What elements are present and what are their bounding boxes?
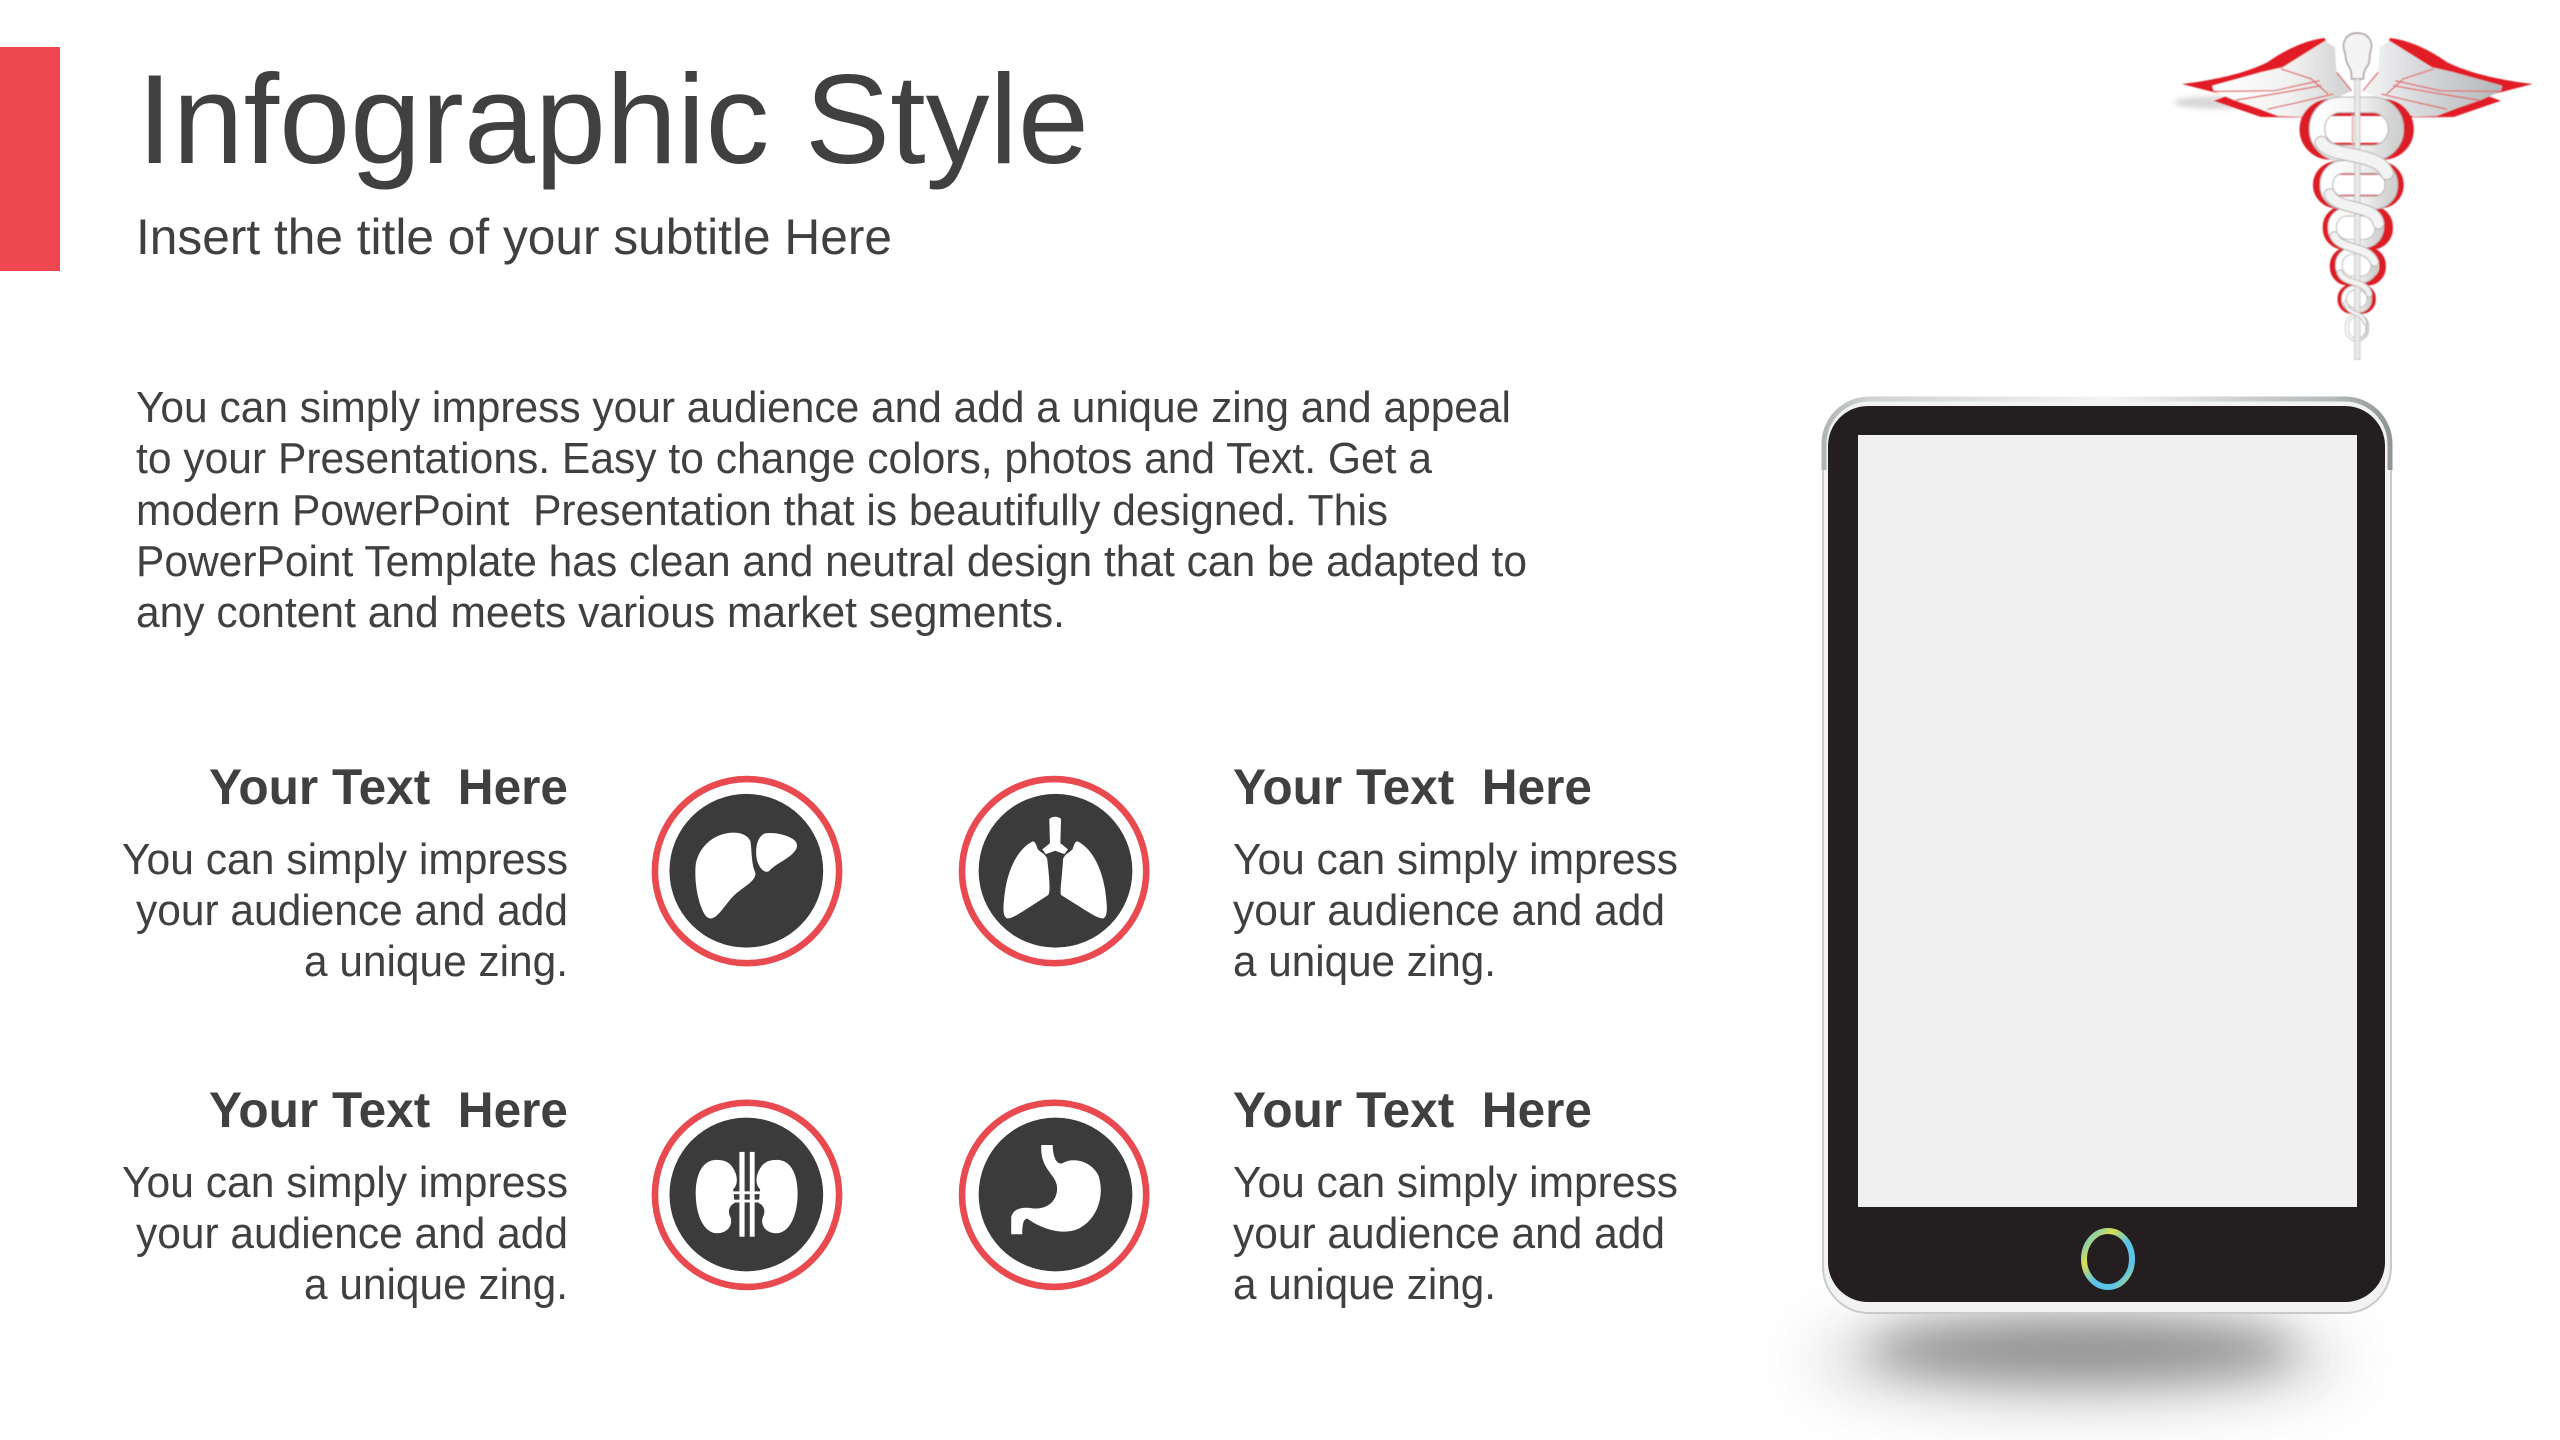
staff head: [2343, 33, 2371, 79]
text block: bottom right: Your Text Here: [1233, 1082, 1592, 1138]
text block: top right: You can simply impress: [1233, 835, 1678, 884]
text block: top left: Your Text Here: [209, 759, 568, 815]
text block: bottom right: a unique zing.: [1233, 1260, 1496, 1309]
text block: top right: a unique zing.: [1233, 937, 1496, 986]
left wing: [2182, 38, 2352, 118]
icon: kidneys: [655, 1103, 839, 1287]
text block: top left: a unique zing.: [304, 937, 568, 986]
text block: bottom left: your audience and add: [136, 1209, 568, 1258]
title: Infographic Style: [137, 48, 1089, 190]
icon: liver: [655, 779, 839, 963]
snake crossings: [2321, 143, 2387, 323]
icon: stomach: [962, 1103, 1146, 1287]
text block: top right: [1233, 759, 1678, 986]
text block: bottom left: a unique zing.: [304, 1260, 568, 1309]
text block: top left: [122, 759, 568, 986]
text block: bottom left: You can simply impress: [122, 1158, 568, 1207]
text block: top right: your audience and add: [1233, 886, 1665, 935]
staff rod: [2352, 79, 2360, 360]
tablet device: [1823, 398, 2391, 1313]
text block: bottom left: Your Text Here: [209, 1082, 568, 1138]
intro paragraph: [136, 383, 1527, 637]
icon: caduceus: [2174, 33, 2533, 360]
red accent bar: [0, 47, 60, 271]
intro paragraph: modern PowerPoint Presentation that is beautifully designed. This: [136, 486, 1388, 535]
text block: top left: your audience and add: [136, 886, 568, 935]
text block: bottom right: [1233, 1082, 1678, 1309]
snake coils: [2308, 105, 2405, 339]
tablet body: [1828, 406, 2385, 1302]
tablet bezel: [1823, 398, 2391, 1313]
right wing: [2363, 38, 2533, 118]
icon: lungs: [962, 779, 1146, 963]
text block: bottom right: your audience and add: [1233, 1209, 1665, 1258]
text block: top right: Your Text Here: [1233, 759, 1592, 815]
intro paragraph: You can simply impress your audience and add a unique zing and appeal: [136, 383, 1511, 432]
tablet home button: [2084, 1231, 2132, 1287]
text block: bottom right: You can simply impress: [1233, 1158, 1678, 1207]
text block: top left: You can simply impress: [122, 835, 568, 884]
intro paragraph: any content and meets various market segments.: [136, 588, 1065, 637]
subtitle: Insert the title of your subtitle Here: [136, 209, 892, 265]
text block: bottom left: [122, 1082, 568, 1309]
tablet shadow: [1808, 1310, 2348, 1410]
intro paragraph: PowerPoint Template has clean and neutral design that can be adapted to: [136, 537, 1527, 586]
tablet screen: [1858, 435, 2357, 1207]
intro paragraph: to your Presentations. Easy to change colors, photos and Text. Get a: [136, 434, 1433, 483]
